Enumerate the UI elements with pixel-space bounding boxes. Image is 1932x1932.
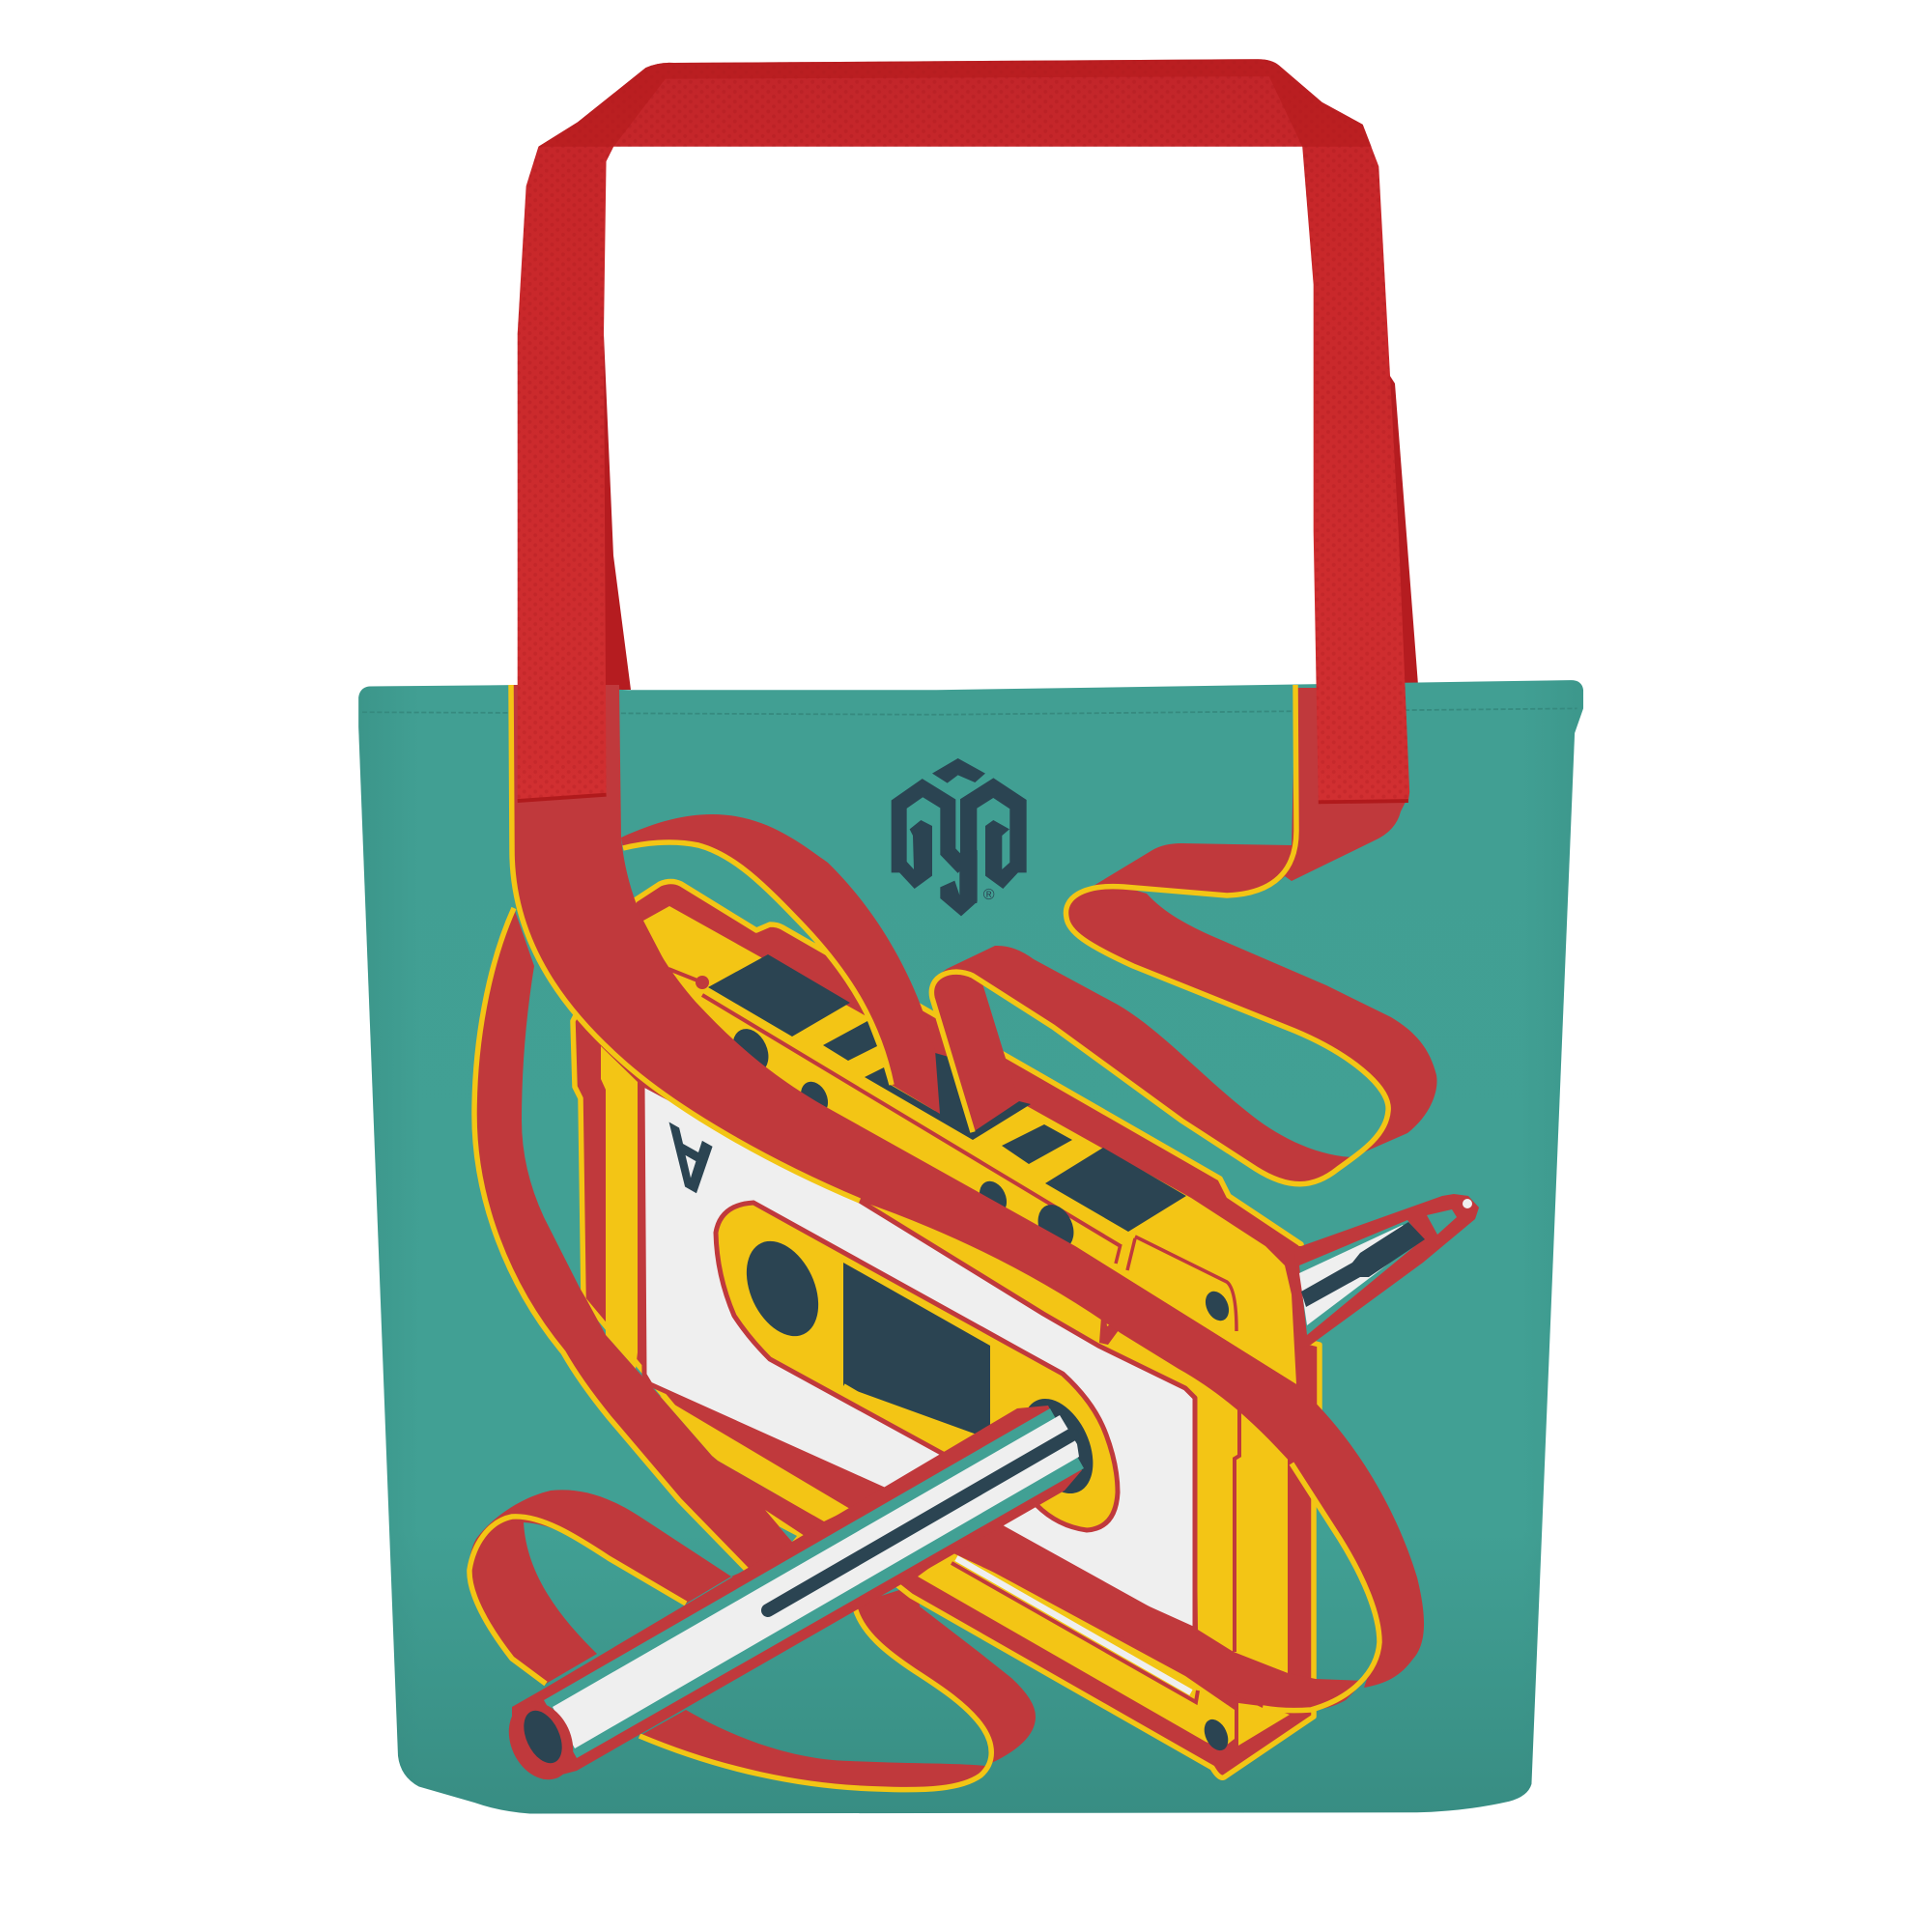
return band bbox=[874, 1507, 1365, 1711]
right ribbon bbox=[931, 685, 1437, 1184]
centre window bbox=[843, 1263, 990, 1439]
logo: ® bbox=[983, 887, 995, 903]
pen inner stripe bbox=[768, 1435, 1072, 1610]
top face divider bbox=[668, 969, 1121, 1246]
corner screw bbox=[1200, 1716, 1233, 1754]
small label nub bbox=[1099, 1317, 1119, 1345]
label window bbox=[716, 1203, 1118, 1530]
top windows bbox=[708, 954, 1186, 1232]
white label bbox=[642, 1084, 1195, 1630]
left ribbon loop bbox=[469, 1490, 731, 1684]
logo bbox=[892, 758, 1026, 916]
lower ribbon loop behind the cassette bbox=[639, 1584, 1036, 1790]
back handle straps bbox=[591, 334, 1418, 690]
front ribbon wrapping the cassette bbox=[511, 685, 1424, 1711]
left ribbon in front of the cassette bbox=[474, 908, 850, 1584]
strap stitched ends bbox=[518, 795, 1408, 802]
right reel hole bbox=[1009, 1387, 1107, 1505]
lower yellow side bbox=[918, 1550, 1235, 1748]
cassette shell bbox=[573, 881, 1320, 1777]
front handle bbox=[518, 59, 1409, 802]
yellow ribbon edge bbox=[931, 685, 1388, 1184]
left reel bbox=[732, 1230, 833, 1348]
cassette bbox=[573, 881, 1320, 1777]
cassette top face bbox=[643, 906, 1296, 1384]
yellow side wedge bbox=[660, 1396, 850, 1521]
tote bag body bbox=[358, 680, 1583, 1814]
right yellow strips bbox=[638, 1082, 1236, 1654]
pen tip bbox=[1294, 1194, 1479, 1348]
lower strand bbox=[932, 946, 1352, 1184]
tab detail bbox=[1116, 1236, 1236, 1331]
top arc ribbon bbox=[621, 814, 940, 1114]
pen bbox=[497, 1406, 1084, 1790]
letter A: A bbox=[668, 1105, 713, 1217]
nub bbox=[696, 976, 709, 989]
pen end bbox=[497, 1691, 585, 1790]
outer loop band bbox=[1065, 887, 1437, 1157]
lower window edge bbox=[843, 1386, 971, 1461]
reel half circles bbox=[725, 1023, 1234, 1324]
small gap wedge bbox=[765, 1510, 805, 1542]
strap drop bbox=[1089, 688, 1406, 895]
bottom wedge bbox=[1238, 1703, 1290, 1746]
strip seam bbox=[1235, 1408, 1239, 1652]
left yellow strip bbox=[601, 1046, 638, 1369]
slot line bbox=[952, 1563, 1198, 1702]
ribbon yellow edge bbox=[511, 685, 1379, 1711]
handle corner shading bbox=[538, 59, 1372, 147]
